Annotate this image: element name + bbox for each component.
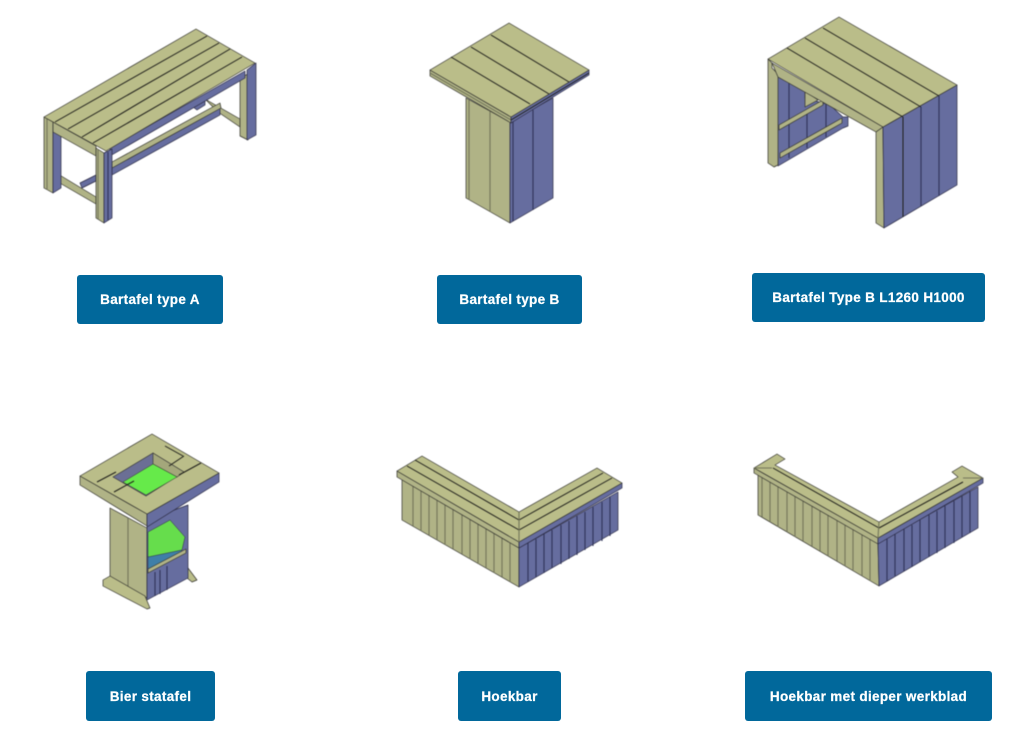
button: Hoekbar met dieper werkblad: Hoekbar met dieper werkblad — [770, 688, 967, 704]
illustration: Bartafel type B — [430, 23, 589, 223]
illustration: Bier statafel — [80, 434, 219, 609]
button: Hoekbar: Hoekbar — [481, 688, 538, 704]
illustration: Bartafel Type B L1260 H1000 — [768, 17, 957, 228]
button: Hoekbar met dieper werkblad — [745, 671, 992, 721]
button: Bartafel Type B L1260 H1000: Bartafel Type B L1260 H1000 — [772, 290, 965, 305]
illustration: Bartafel type A — [44, 29, 256, 223]
button: Bier statafel — [86, 671, 215, 721]
button: Bartafel type A: Bartafel type A — [100, 292, 200, 307]
button: Bier statafel: Bier statafel — [110, 688, 191, 704]
illustration: Hoekbar — [397, 456, 622, 587]
button: Hoekbar — [458, 671, 561, 721]
illustration: Hoekbar met dieper werkblad — [754, 454, 983, 586]
button: Bartafel type B: Bartafel type B — [459, 292, 560, 307]
button: Bartafel type A — [77, 275, 223, 324]
button: Bartafel Type B L1260 H1000 — [752, 273, 985, 322]
button: Bartafel type B — [437, 275, 582, 324]
